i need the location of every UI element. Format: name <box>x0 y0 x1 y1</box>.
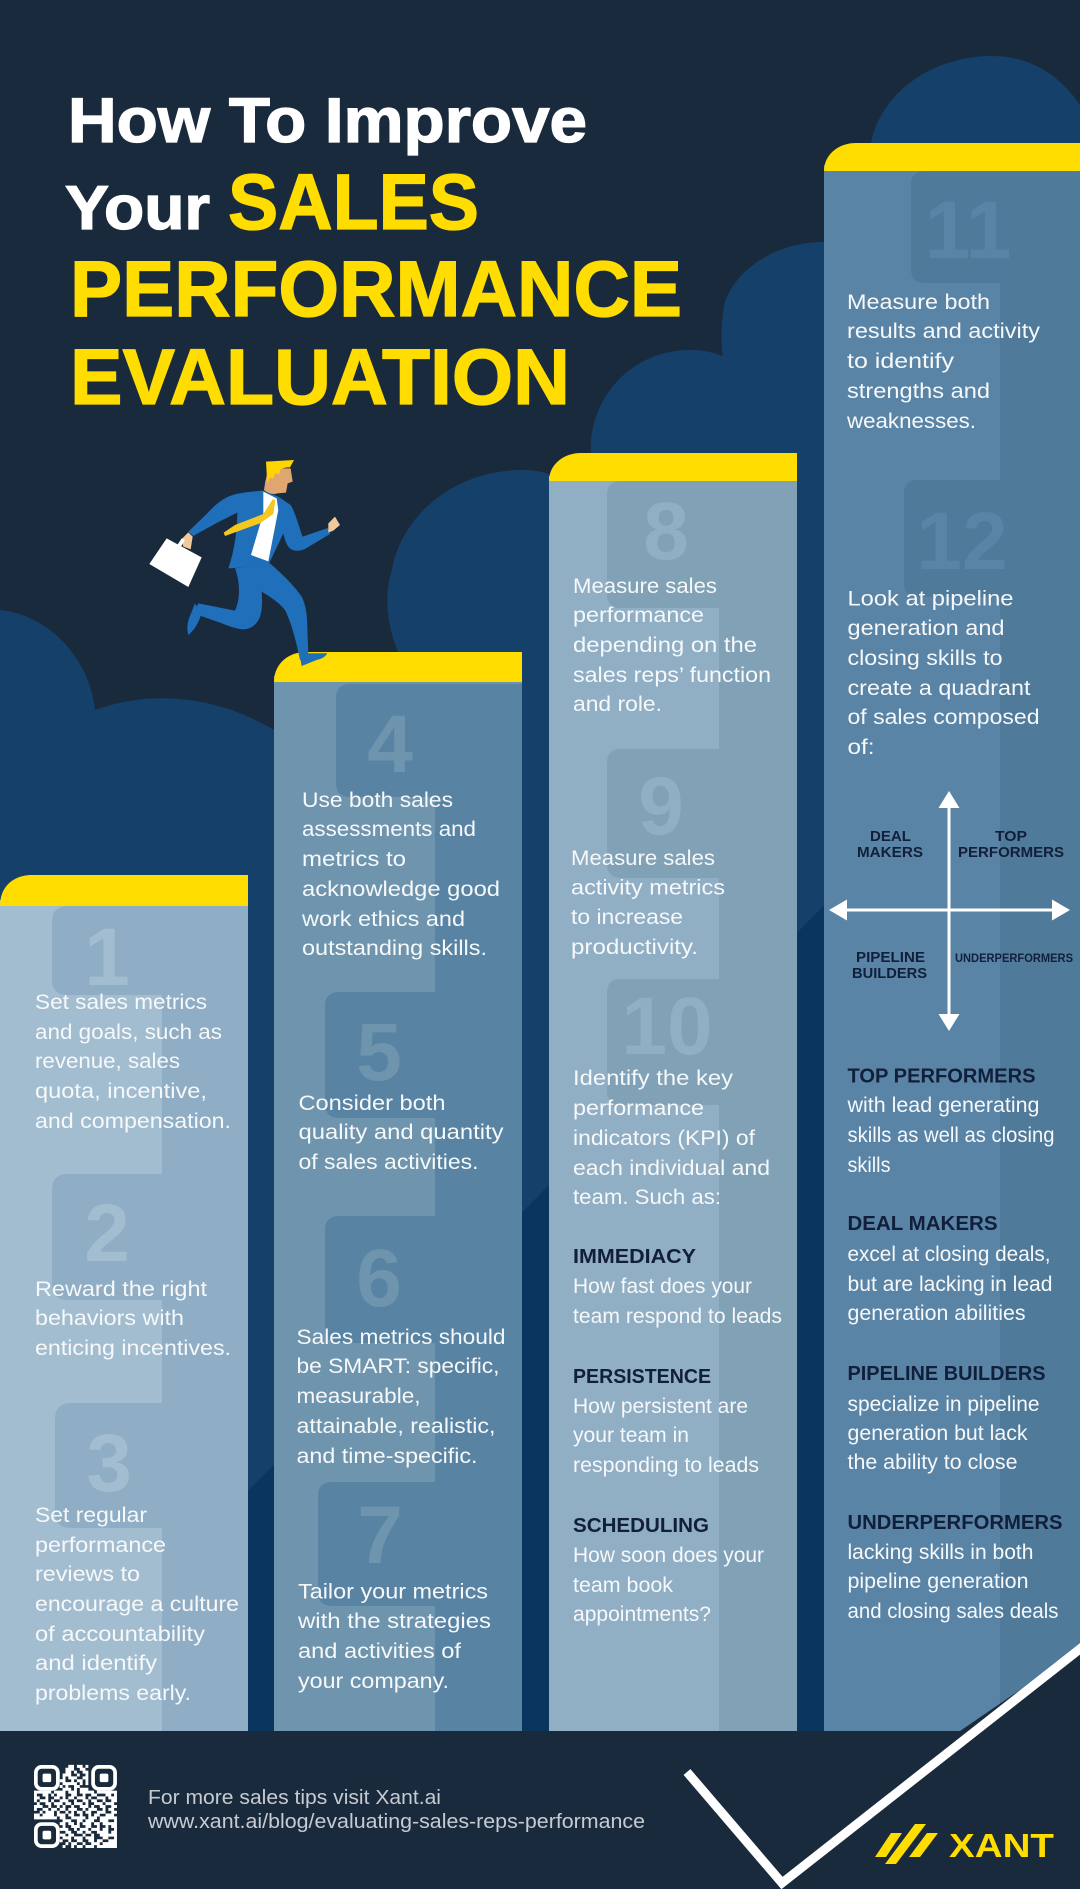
step 8 text <box>573 574 771 716</box>
step 5 number: 5 <box>356 1007 402 1098</box>
step 6 number: 6 <box>356 1233 402 1324</box>
KPI: persistence: PERSISTENCE <box>573 1366 711 1388</box>
quadrant labels: TOP <box>995 828 1027 845</box>
title: SALES <box>228 157 479 246</box>
step 12 text: of: <box>848 735 874 759</box>
quadrant labels: DEAL <box>870 828 911 845</box>
KPI: persistence: How persistent are <box>573 1394 748 1418</box>
step 3 text: of accountability <box>35 1622 205 1646</box>
step 2 number: 2 <box>84 1188 130 1279</box>
footer QR code <box>34 1766 117 1847</box>
footer background <box>0 1649 1080 1889</box>
step 12 number: 12 <box>916 496 1008 587</box>
title: Your <box>65 174 210 243</box>
step 10 number: 10 <box>621 981 713 1072</box>
step 9 text <box>571 846 725 959</box>
step 11 text: weaknesses. <box>846 409 976 433</box>
step 8 text: sales reps’ function <box>573 663 771 687</box>
step 5 text: quality and quantity <box>298 1120 504 1144</box>
QR finder centres <box>43 1774 108 1839</box>
quadrant labels: UNDERPERFORMERS <box>955 953 1073 965</box>
pipeline builders description: PIPELINE BUILDERS <box>848 1363 1046 1385</box>
quadrant labels <box>852 828 1073 982</box>
step 1 text: and goals, such as <box>35 1020 222 1044</box>
step 4 text: assessments and <box>302 817 476 841</box>
underperformers description: lacking skills in both <box>848 1540 1034 1564</box>
pipeline builders description: generation but lack <box>848 1421 1028 1445</box>
quadrant labels: PERFORMERS <box>958 844 1064 861</box>
step 8 number: 8 <box>643 486 689 577</box>
step 3 text: performance <box>35 1533 166 1557</box>
step 1 text: revenue, sales <box>35 1049 180 1073</box>
step 3 text: encourage a culture <box>35 1592 239 1616</box>
footer text <box>147 1786 645 1833</box>
step 1 text: quota, incentive, <box>35 1079 207 1103</box>
pipeline builders description: the ability to close <box>848 1450 1018 1474</box>
man: shirt <box>251 492 278 561</box>
top performers description <box>847 1066 1054 1177</box>
KPI: scheduling <box>573 1515 764 1626</box>
step 11 text: results and activity <box>847 319 1040 343</box>
deal makers description: generation abilities <box>848 1301 1026 1325</box>
underperformers description: pipeline generation <box>848 1569 1028 1593</box>
step 10 text <box>573 1066 770 1209</box>
step 12 text: of sales composed <box>848 705 1040 729</box>
step 4 text: outstanding skills. <box>302 936 487 960</box>
KPI: immediacy: How fast does your <box>573 1274 752 1298</box>
deal makers description: DEAL MAKERS <box>848 1213 998 1235</box>
step 10 text: team. Such as: <box>573 1185 721 1209</box>
icon: running businessman <box>149 460 340 666</box>
step 10 text: indicators (KPI) of <box>573 1126 755 1150</box>
Xant logo <box>875 1824 1054 1864</box>
KPI: persistence: your team in <box>573 1423 689 1447</box>
step 4 text: acknowledge good <box>302 877 500 901</box>
step 10 text: each individual and <box>573 1156 770 1180</box>
step 3 text: problems early. <box>35 1681 191 1705</box>
man: hands <box>182 517 340 549</box>
pipeline builders description: specialize in pipeline <box>848 1392 1040 1416</box>
step 11 text: Measure both <box>847 290 990 314</box>
pipeline builders description <box>848 1363 1046 1474</box>
deal makers description <box>848 1213 1052 1325</box>
step 6 text: attainable, realistic, <box>296 1414 496 1438</box>
step 11 number: 11 <box>925 185 1011 276</box>
briefcase <box>149 538 202 587</box>
logo slashes <box>875 1824 938 1864</box>
step 5 text: of sales activities. <box>298 1150 478 1174</box>
step 7 text <box>297 1580 491 1693</box>
man: hair <box>266 460 294 484</box>
KPI: persistence: responding to leads <box>573 1453 759 1477</box>
step 7 text: with the strategies <box>297 1609 491 1633</box>
decorative V check mark <box>687 1641 1080 1883</box>
title: How To Improve <box>68 86 587 156</box>
top performers description: skills as well as closing <box>848 1123 1054 1147</box>
man: legs <box>194 563 308 660</box>
quadrant axes with arrows <box>829 791 1070 1031</box>
KPI: scheduling: SCHEDULING <box>573 1515 709 1537</box>
step 6 text: and time-specific. <box>296 1444 478 1468</box>
step 4 text: Use both sales <box>302 788 453 812</box>
step 1 number: 1 <box>84 912 130 1003</box>
step 5 text <box>298 1091 504 1174</box>
step 11 text: strengths and <box>847 379 990 403</box>
quadrant labels: MAKERS <box>857 844 923 861</box>
panel: column 4 <box>824 143 1080 1731</box>
KPI: persistence <box>573 1366 759 1477</box>
step 12 text: closing skills to <box>848 646 1003 670</box>
step 9 text: Measure sales <box>571 846 715 870</box>
darker diagonal background <box>12 645 1080 1731</box>
step 8 text: depending on the <box>573 633 757 657</box>
step 4 text: metrics to <box>302 847 406 871</box>
underperformers description: and closing sales deals <box>848 1599 1058 1623</box>
step 1 text <box>35 990 231 1133</box>
step 10 text: performance <box>573 1096 704 1120</box>
step 7 text: Tailor your metrics <box>298 1580 488 1604</box>
man: tie <box>224 499 275 536</box>
man: shoes <box>187 603 327 666</box>
step 9 text: to increase <box>571 905 683 929</box>
man: head <box>264 468 293 494</box>
step 3 text: reviews to <box>35 1562 140 1586</box>
KPI: scheduling: appointments? <box>573 1602 711 1626</box>
title: PERFORMANCE <box>70 244 682 333</box>
step 1 text: Set sales metrics <box>35 990 207 1014</box>
footer text: For more sales tips visit Xant.ai <box>148 1786 441 1809</box>
step 6 text: measurable, <box>296 1384 420 1408</box>
step 8 text: and role. <box>573 692 662 716</box>
panel: column 2 <box>274 652 522 1731</box>
quadrant chart <box>829 791 1073 1031</box>
logo wordmark: XANT <box>949 1827 1054 1864</box>
QR finder patterns <box>36 1767 115 1846</box>
step 7 text: your company. <box>298 1669 449 1693</box>
KPI: scheduling: team book <box>573 1573 673 1597</box>
step 6 text: be SMART: specific, <box>296 1354 500 1378</box>
KPI: immediacy <box>573 1246 782 1328</box>
top performers description: skills <box>848 1153 890 1177</box>
step 12 text: Look at pipeline <box>848 586 1014 610</box>
step 7 text: and activities of <box>298 1639 461 1663</box>
step 8 text: Measure sales <box>573 574 717 598</box>
step 6 text <box>296 1325 506 1468</box>
step 2 text: enticing incentives. <box>35 1336 231 1360</box>
quadrant labels: BUILDERS <box>852 965 927 982</box>
title <box>65 86 682 421</box>
step 2 text <box>35 1277 231 1360</box>
KPI: immediacy: team respond to leads <box>573 1304 782 1328</box>
step 2 text: behaviors with <box>35 1306 184 1330</box>
panel: column 3 <box>549 453 797 1731</box>
step 5 text: Consider both <box>298 1091 446 1115</box>
underperformers description: UNDERPERFORMERS <box>848 1512 1062 1534</box>
step 9 text: productivity. <box>571 935 698 959</box>
panel: column 1 <box>0 875 248 1731</box>
step 3 text: and identify <box>35 1651 157 1675</box>
step 8 text: performance <box>573 603 704 627</box>
step 11 text <box>846 290 1040 433</box>
underperformers description <box>848 1512 1062 1623</box>
step 7 number: 7 <box>357 1490 403 1581</box>
deal makers description: but are lacking in lead <box>848 1272 1052 1296</box>
man: arms and jacket <box>188 491 330 568</box>
step 12 text: create a quadrant <box>848 676 1031 700</box>
step 12 text <box>848 586 1040 759</box>
KPI: scheduling: How soon does your <box>573 1543 764 1567</box>
step 4 text <box>301 788 500 960</box>
step 3 text: Set regular <box>35 1503 147 1527</box>
step 10 text: Identify the key <box>573 1066 733 1090</box>
quadrant labels: PIPELINE <box>856 949 925 966</box>
step 3 number: 3 <box>86 1418 132 1509</box>
QR data modules <box>34 1766 117 1847</box>
step 9 number: 9 <box>638 761 684 852</box>
step 4 text: work ethics and <box>301 907 465 931</box>
step 4 number: 4 <box>367 699 413 790</box>
step 1 text: and compensation. <box>35 1109 231 1133</box>
top performers description: with lead generating <box>847 1093 1040 1117</box>
step 12 text: generation and <box>848 616 1004 640</box>
step 2 text: Reward the right <box>35 1277 207 1301</box>
step 6 text: Sales metrics should <box>296 1325 506 1349</box>
footer text: www.xant.ai/blog/evaluating-sales-reps-performance <box>147 1810 645 1833</box>
KPI: immediacy: IMMEDIACY <box>573 1246 697 1268</box>
deal makers description: excel at closing deals, <box>848 1242 1050 1266</box>
step 9 text: activity metrics <box>571 876 725 900</box>
top performers description: TOP PERFORMERS <box>848 1066 1036 1088</box>
step 3 text <box>35 1503 239 1705</box>
title: EVALUATION <box>70 332 570 421</box>
step 11 text: to identify <box>847 349 954 373</box>
